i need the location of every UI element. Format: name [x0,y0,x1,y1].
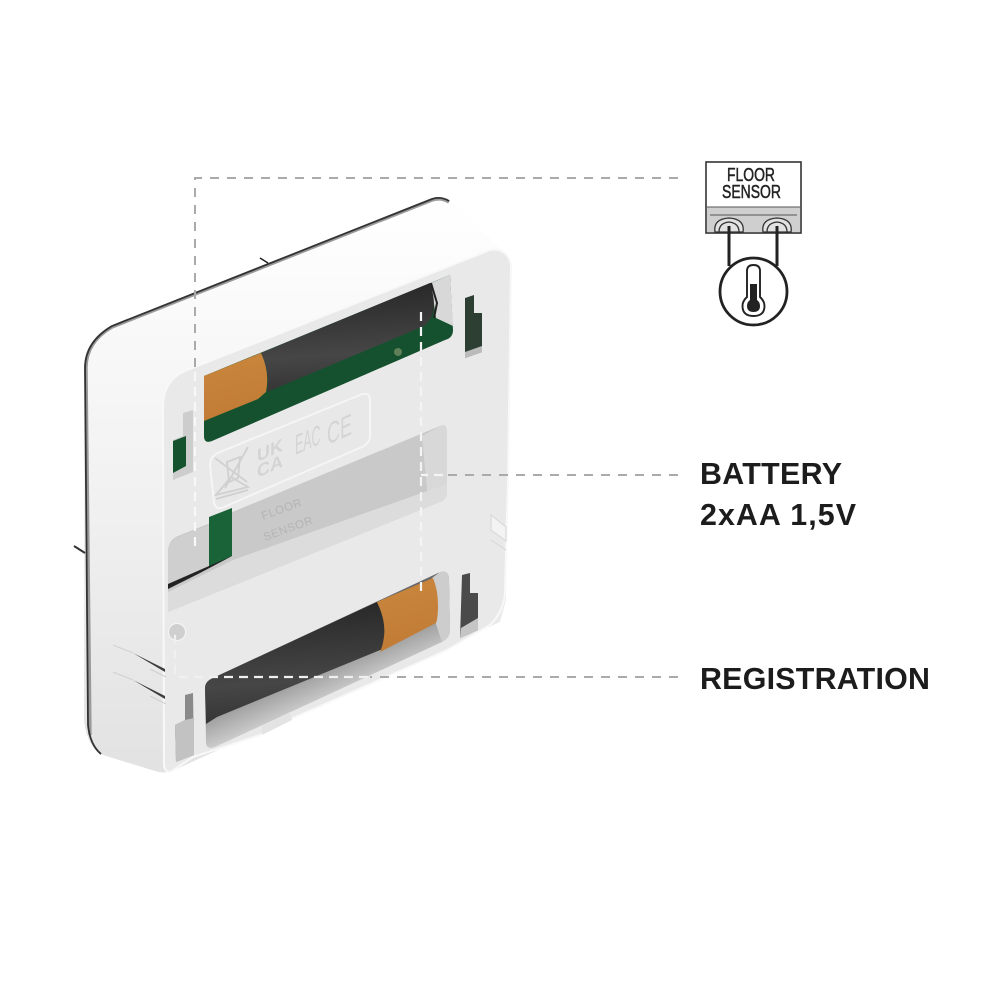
slot light lower wall [465,346,482,358]
label: battery: BATTERY [700,457,842,491]
recess lower lip [168,484,447,612]
left bottom slot [175,693,194,762]
front bezel dark line [85,198,449,754]
battery spec: 2xAA 1,5V [700,498,857,532]
black battery body [261,283,434,392]
CE mark: CE [327,408,352,452]
crossed bin mark [215,447,248,499]
opening right wall [431,275,453,326]
terminal gray band [707,207,800,232]
thermometer [742,265,764,316]
lower case tab [262,712,292,735]
EAC mark: EAC [295,418,321,461]
small side notch left [74,546,85,553]
registration button [168,624,186,640]
sensor circle [720,258,787,325]
leader on device [175,630,368,677]
slot light wall [460,618,478,638]
dashed leader: battery [421,312,678,593]
band lines [706,207,801,215]
side grooves left [113,645,166,704]
device side shell [84,197,510,772]
SENSOR label: SENSOR [722,182,781,202]
CA line: CA [257,450,283,482]
certification plate [210,394,370,508]
label: battery [700,457,857,532]
FLOOR label: FLOOR [727,165,775,185]
terminal block [168,525,209,585]
right top slot [465,295,482,358]
embossed text: FLOOR [260,497,304,523]
floor sensor recess [168,425,447,612]
opening right wall [432,571,450,642]
device: thermostat back view [74,197,511,772]
small side notch top [260,258,268,263]
slot light wall [175,718,194,762]
orange battery cap [377,578,438,652]
slot green interior [173,436,186,473]
label: registration: REGISTRATION [700,662,930,696]
side grooves right [491,515,506,550]
groove dark edges [133,653,165,699]
dark gap [168,556,232,589]
leader over batteries [421,312,443,593]
battery terminal wires [431,283,437,318]
board screw dot [394,348,402,356]
wires [729,226,777,266]
dashed leader: floor sensor [195,178,678,546]
right bottom slot [460,573,478,638]
dashed leader: registration [175,630,678,677]
leader on device [194,372,196,546]
back plate [163,250,511,772]
icon: floor sensor terminal [706,162,801,325]
terminal ovals [715,218,791,232]
embossed text second line: SENSOR [262,515,315,544]
left top slot [173,410,193,480]
orange battery cap [204,353,267,421]
terminal box [706,162,801,233]
circuit board piece [209,508,232,568]
front bezel edge [86,199,449,735]
upper battery opening [204,275,453,442]
lower battery opening [205,571,450,748]
UK CA mark: UK [257,434,283,466]
black battery body [205,602,386,724]
recess right light wall [422,425,447,502]
mercury [747,284,760,312]
